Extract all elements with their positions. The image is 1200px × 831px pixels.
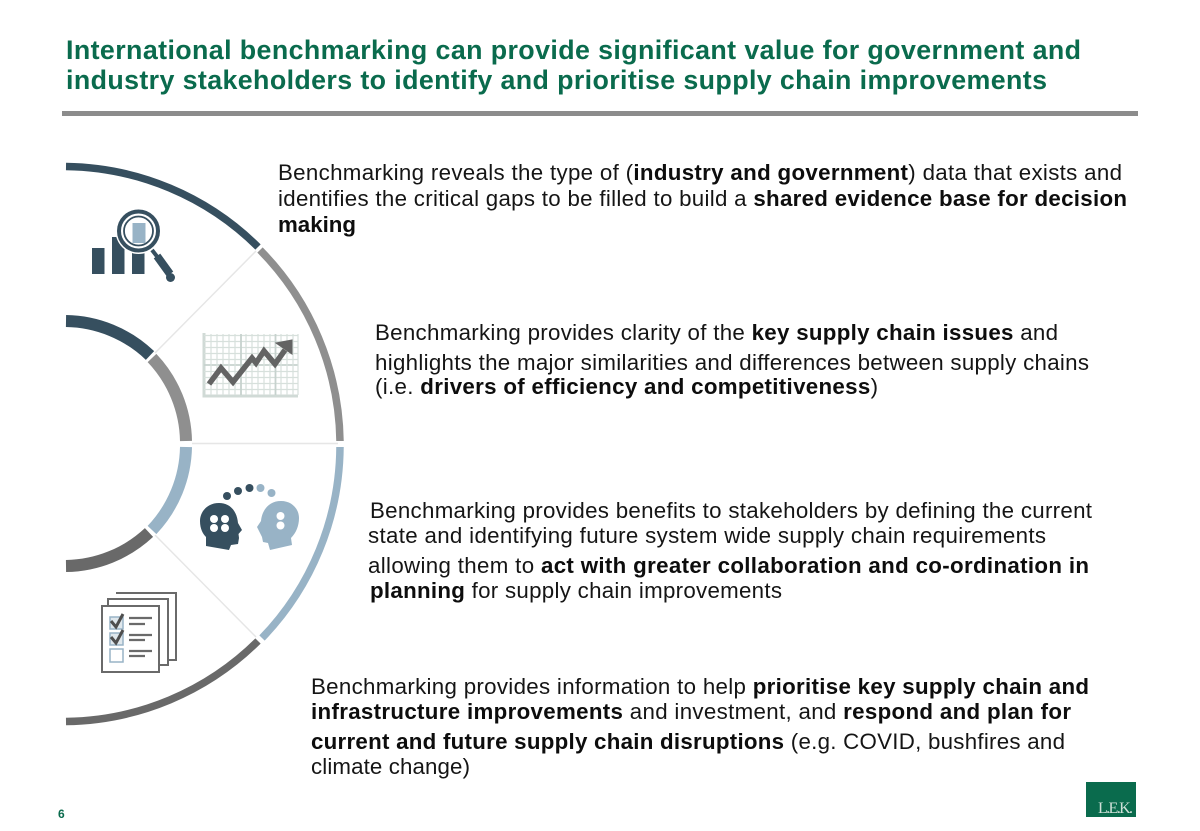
text block 3: planning for supply chain improvements <box>370 578 782 603</box>
logo <box>1086 782 1136 817</box>
inner ring arcs <box>66 321 186 566</box>
icon: line chart on grid <box>204 333 298 396</box>
segment divider lines <box>155 251 338 637</box>
text block 4: current and future supply chain disruptions (e.g. COVID, bushfires and <box>311 729 1065 754</box>
logo: L.E.K. <box>1098 800 1133 817</box>
icon: magnifier over bar chart <box>92 208 175 282</box>
icon: two heads exchanging ideas <box>200 484 299 550</box>
text block 4: climate change) <box>311 754 470 779</box>
text block 4: infrastructure improvements and investment, and respond and plan for <box>311 699 1071 724</box>
title <box>66 35 1081 95</box>
outer ring arcs <box>66 166 340 722</box>
text block 1 <box>278 160 1127 237</box>
text block 4 <box>311 674 1089 779</box>
text block 1: making <box>278 212 356 237</box>
title: International benchmarking can provide significant value for government and <box>66 35 1081 65</box>
icon: checklist documents <box>102 593 176 672</box>
text block 1: identifies the critical gaps to be filled to build a shared evidence base for decision <box>278 186 1127 211</box>
text block 3 <box>368 498 1093 603</box>
text block 3: allowing them to act with greater collaboration and co-ordination in <box>368 553 1089 578</box>
title: industry stakeholders to identify and prioritise supply chain improvements <box>66 65 1047 95</box>
text block 2: (i.e. drivers of efficiency and competitiveness) <box>375 374 878 399</box>
text block 2: Benchmarking provides clarity of the key supply chain issues and <box>375 320 1058 345</box>
text block 3: state and identifying future system wide supply chain requirements <box>368 523 1046 548</box>
text block 2: highlights the major similarities and differences between supply chains <box>375 350 1089 375</box>
text block 1: Benchmarking reveals the type of (industry and government) data that exists and <box>278 160 1122 185</box>
light head <box>257 501 299 550</box>
page number: 6 <box>58 807 65 821</box>
text block 4: Benchmarking provides information to help prioritise key supply chain and <box>311 674 1089 699</box>
dots <box>223 484 276 500</box>
text block 3: Benchmarking provides benefits to stakeholders by defining the current <box>370 498 1093 523</box>
dark head <box>200 503 242 550</box>
text block 2 <box>375 320 1089 399</box>
